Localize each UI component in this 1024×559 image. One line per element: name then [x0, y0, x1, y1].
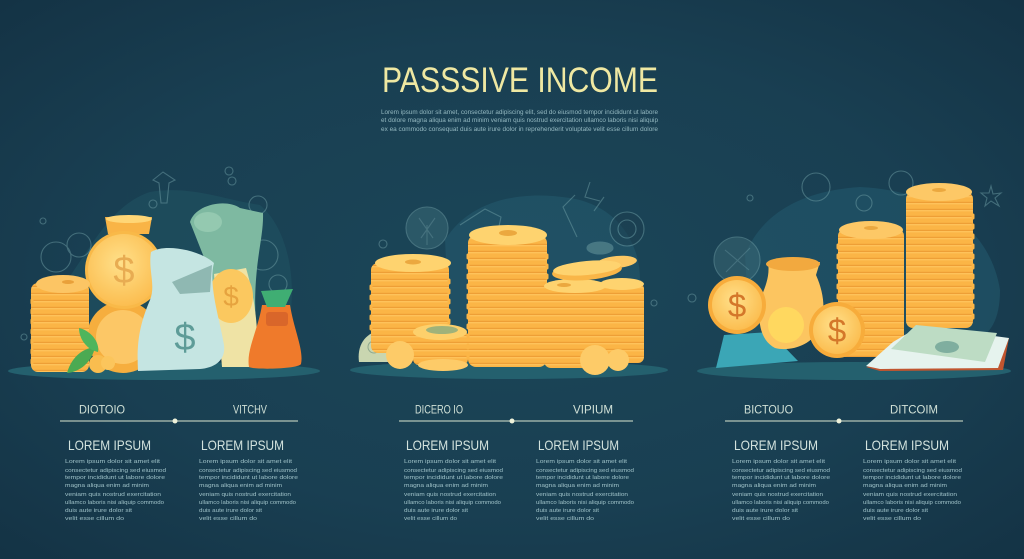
body right: Lorem ipsum dolor sit amet elit	[863, 459, 956, 465]
divider with dot	[60, 418, 298, 424]
body left: consectetur adipiscing sed eiusmod	[65, 468, 166, 474]
panel: money bags illustration	[8, 167, 320, 380]
body left: velit esse cillum do	[404, 516, 457, 522]
body left: magna aliqua enim ad minim	[404, 483, 488, 489]
header labels: DITCOIM	[890, 402, 938, 416]
body right: duis aute irure dolor sit	[863, 508, 928, 514]
body right: veniam quis nostrud exercitation	[536, 492, 628, 498]
body right	[863, 459, 962, 522]
body left: tempor incididunt ut labore dolore	[404, 475, 503, 481]
orange money bag	[249, 289, 302, 369]
column text: panel three	[725, 402, 963, 522]
header labels	[744, 402, 938, 416]
dollar coin left: $	[728, 287, 746, 324]
panel: coin stacks illustration	[350, 182, 668, 379]
subheading left: LOREM IPSUM	[68, 437, 151, 453]
divider with dot	[399, 418, 633, 424]
body left: velit esse cillum do	[732, 516, 790, 522]
loose coins	[386, 341, 629, 375]
intro paragraph	[381, 110, 659, 133]
body right: magna aliqua enim ad minim	[863, 483, 947, 489]
header labels: BICTOUO	[744, 402, 793, 416]
header labels: DIOTOIO	[79, 402, 125, 416]
panel: coins, jar and banknotes illustration	[688, 171, 1011, 380]
floating coin symbols	[379, 182, 657, 306]
jar	[759, 257, 823, 349]
white money bag	[138, 248, 224, 371]
dollar coin right: $	[828, 312, 846, 349]
body right: veniam quis nostrud exercitation	[199, 492, 291, 498]
body left: duis aute irure dolor sit	[65, 508, 132, 514]
column text: panel one	[60, 402, 298, 522]
body left	[65, 459, 166, 522]
body left: magna aliqua enim ad minim	[732, 483, 816, 489]
body right	[199, 459, 298, 522]
body left	[732, 459, 830, 522]
floor ellipse	[8, 362, 320, 380]
body left: duis aute irure dolor sit	[732, 508, 798, 514]
body left: ullamco laboris nisi aliquip commodo	[404, 500, 501, 506]
green money bag	[190, 203, 263, 330]
white money bag: $	[174, 317, 196, 359]
body right: Lorem ipsum dolor sit amet elit	[199, 459, 292, 465]
body left: veniam quis nostrud exercitation	[404, 492, 496, 498]
body left: tempor incididunt ut labore dolore	[65, 475, 165, 481]
backdrop glow	[445, 195, 640, 340]
header labels	[79, 402, 267, 416]
body right: tempor incididunt ut labore dolore	[199, 475, 298, 481]
body right: ullamco laboris nisi aliquip commodo	[863, 500, 961, 506]
subheading right: LOREM IPSUM	[538, 437, 619, 453]
column text: panel two	[399, 402, 634, 522]
body left: ullamco laboris nisi aliquip commodo	[65, 500, 164, 506]
banknotes book	[866, 325, 1009, 371]
body right: velit esse cillum do	[536, 516, 594, 522]
intro paragraph: Lorem ipsum dolor sit amet, consectetur adipiscing elit, sed do eiusmod tempor incididunt ut labore	[381, 110, 659, 116]
body left	[404, 459, 503, 522]
body right: consectetur adipiscing sed eiusmod	[863, 468, 962, 474]
body left: veniam quis nostrud exercitation	[732, 492, 823, 498]
header labels: VITCHV	[233, 402, 267, 416]
body right: consectetur adipiscing sed eiusmod	[536, 468, 634, 474]
body right: tempor incididunt ut labore dolore	[536, 475, 629, 481]
body left: velit esse cillum do	[65, 516, 124, 522]
coin stack A	[371, 254, 451, 353]
divider with dot	[725, 418, 963, 424]
backdrop glow	[60, 190, 292, 350]
body left: consectetur adipiscing sed eiusmod	[732, 468, 830, 474]
title: PASSSIVE INCOME	[382, 61, 658, 100]
body right: magna aliqua enim ad minim	[536, 483, 619, 489]
yellow coin bag: $	[223, 281, 239, 312]
subheading left: LOREM IPSUM	[406, 437, 489, 453]
floor ellipse	[350, 361, 668, 379]
body left: veniam quis nostrud exercitation	[65, 492, 161, 498]
body right	[536, 459, 634, 522]
subheading left: LOREM IPSUM	[734, 437, 818, 453]
tilted coins	[551, 254, 637, 283]
body right: duis aute irure dolor sit	[199, 508, 262, 514]
large coin with cap	[85, 215, 163, 373]
subheading right: LOREM IPSUM	[865, 437, 949, 453]
body right: duis aute irure dolor sit	[536, 508, 599, 514]
coin stack C	[544, 279, 607, 368]
floating coin symbols	[688, 171, 1001, 302]
body right: velit esse cillum do	[863, 516, 921, 522]
tall coin stack	[906, 183, 973, 328]
body right: tempor incididunt ut labore dolore	[863, 475, 961, 481]
body left: consectetur adipiscing sed eiusmod	[404, 468, 503, 474]
floating coin symbols	[21, 167, 287, 340]
medium coin stack	[838, 221, 904, 357]
body left: ullamco laboris nisi aliquip commodo	[732, 500, 829, 506]
body right: veniam quis nostrud exercitation	[863, 492, 957, 498]
floor ellipse	[697, 362, 1011, 380]
yellow coin bag	[209, 268, 257, 367]
body right: ullamco laboris nisi aliquip commodo	[536, 500, 634, 506]
coin stack	[31, 275, 90, 372]
body left: magna aliqua enim ad minim	[65, 483, 149, 489]
body left: Lorem ipsum dolor sit amet elit	[65, 459, 160, 465]
swirl coin	[359, 331, 392, 362]
body left: tempor incididunt ut labore dolore	[732, 475, 830, 481]
body right: ullamco laboris nisi aliquip commodo	[199, 500, 296, 506]
intro paragraph: ex ea commodo consequat duis aute irure dolor in reprehenderit voluptate velit esse cillum dolore	[381, 127, 659, 133]
body right: magna aliqua enim ad minim	[199, 483, 282, 489]
coin and leaves	[67, 328, 115, 373]
body right: velit esse cillum do	[199, 516, 257, 522]
body left: duis aute irure dolor sit	[404, 508, 468, 514]
backdrop glow	[745, 187, 1000, 340]
small coin stack	[413, 324, 468, 365]
body right: consectetur adipiscing sed eiusmod	[199, 468, 297, 474]
intro paragraph: et dolore magna aliqua enim ad minim veniam quis nostrud exercitation ullamco laboris nisi aliquip	[381, 118, 659, 124]
body right: Lorem ipsum dolor sit amet elit	[536, 459, 627, 465]
large coin with cap: $	[113, 250, 135, 292]
header labels	[415, 402, 613, 416]
body left: Lorem ipsum dolor sit amet elit	[404, 459, 496, 465]
header labels: VIPIUM	[573, 402, 613, 416]
coin stack B	[468, 225, 547, 367]
dollar coin left	[708, 276, 766, 334]
header labels: DICERO IO	[415, 402, 463, 416]
subheading right: LOREM IPSUM	[201, 437, 284, 453]
body left: Lorem ipsum dolor sit amet elit	[732, 459, 825, 465]
dollar coin right	[809, 302, 865, 358]
coin stack D	[600, 278, 644, 363]
blue cloth	[716, 332, 798, 368]
